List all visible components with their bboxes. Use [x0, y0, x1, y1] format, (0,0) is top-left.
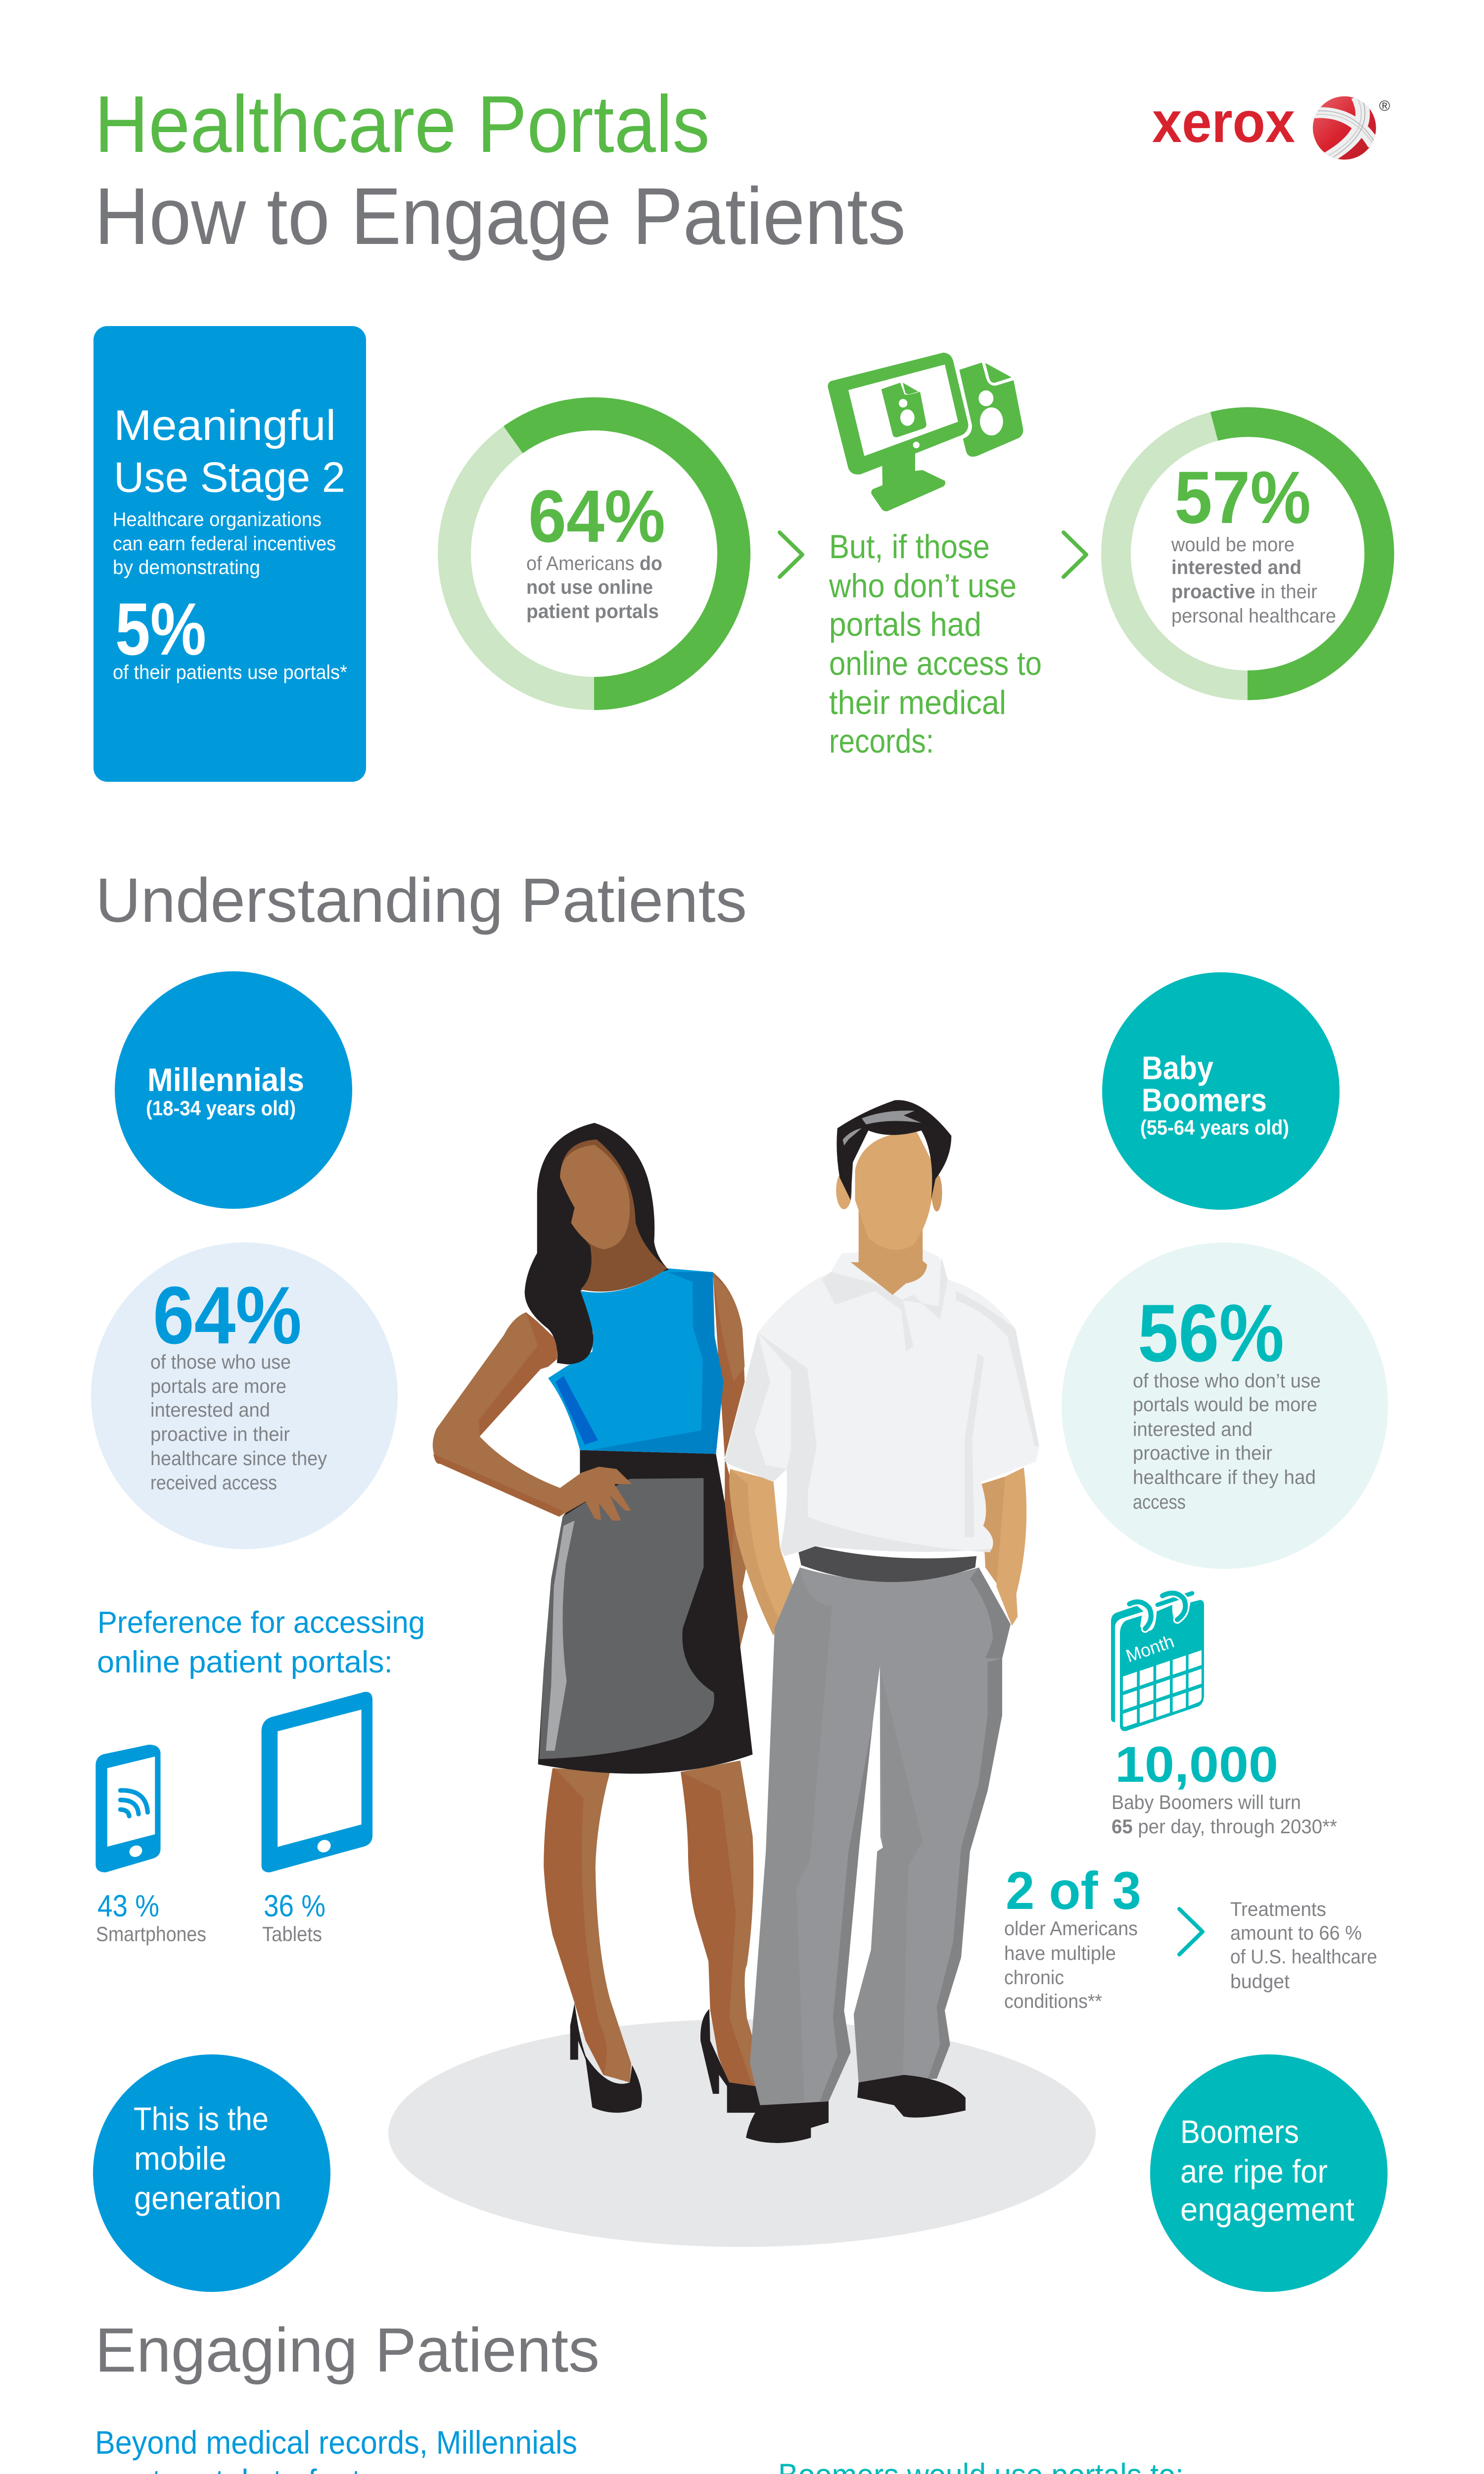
donut chart: 57% [1116, 422, 1379, 685]
circle: boomers stat 56%: of those who don’t use [1133, 1370, 1321, 1392]
stat: 43% smartphones: Smartphones [96, 1922, 206, 1946]
panel body text [113, 509, 336, 578]
stat: 2 of 3: 2 of 3 [1006, 1860, 1141, 1920]
text: treatments: of U.S. healthcare [1230, 1946, 1377, 1968]
circle: boomers stat 56%: healthcare if they had [1133, 1467, 1316, 1488]
text: millennials want portals to feature: Beyond medical records, Millennials [95, 2424, 577, 2461]
text: but, if those who don't use portals: who don’t use [829, 567, 1017, 605]
stat: 2 of 3: have multiple [1004, 1943, 1116, 1964]
donut chart: 57%: proactive in their [1171, 581, 1317, 603]
panel body text: can earn federal incentives [113, 533, 336, 555]
stat: 2 of 3: chronic [1004, 1967, 1064, 1989]
circle: millennials: Millennials [147, 1061, 304, 1098]
text: but, if those who don't use portals [829, 528, 1042, 760]
stat: 43% smartphones [96, 1889, 206, 1946]
circle: baby boomers: (55-64 years old) [1140, 1116, 1289, 1139]
text: treatments: budget [1230, 1971, 1290, 1993]
circle: millennials stat 64% [91, 1242, 398, 1549]
title [94, 79, 906, 261]
circle: boomers are ripe for engagement [1150, 2054, 1388, 2292]
stat: 5% [113, 587, 347, 683]
title: How to Engage Patients [94, 171, 906, 261]
circle: millennials: (18-34 years old) [146, 1096, 296, 1120]
text: preference heading: online patient portals: [97, 1645, 393, 1679]
circle: boomers stat 56%: proactive in their [1133, 1442, 1272, 1464]
stat: 2 of 3: conditions** [1004, 1991, 1102, 2012]
stat: 2 of 3: older Americans [1004, 1918, 1138, 1940]
circle: baby boomers: Baby [1142, 1049, 1213, 1086]
donut chart: 57%: would be more [1171, 534, 1295, 556]
circle: boomers are ripe for engagement: Boomers [1180, 2113, 1299, 2150]
title: Healthcare Portals [94, 79, 710, 169]
stat: 5%: 5% [115, 587, 206, 670]
circle: millennials stat 64%: 64% [153, 1270, 302, 1361]
circle: millennials stat 64%: portals are more [150, 1376, 286, 1397]
circle: this is the mobile generation: mobile [134, 2140, 227, 2177]
text: preference heading: Preference for accessing [97, 1606, 425, 1640]
icon: calendar [1111, 1593, 1204, 1731]
circle: boomers are ripe for engagement: are ripe for [1180, 2153, 1328, 2189]
panel body text: Healthcare organizations [113, 509, 322, 530]
circle: millennials stat 64%: of those who use [150, 1351, 291, 1373]
circle: millennials stat 64%: received access [150, 1472, 277, 1494]
text: but, if those who don't use portals: But, if those [829, 528, 990, 566]
donut chart: 57%: interested and [1171, 557, 1301, 578]
arrow: chevron [1064, 532, 1086, 577]
panel: meaningful use stage 2 [93, 326, 366, 782]
stat: 36% tablets: Tablets [262, 1922, 322, 1946]
stat: 2 of 3 [1004, 1860, 1141, 2012]
circle: millennials stat 64%: interested and [150, 1399, 270, 1421]
circle: boomers stat 56%: access [1133, 1491, 1186, 1513]
text: treatments [1230, 1899, 1377, 1993]
logo: xerox: ® [1379, 98, 1390, 114]
stat: 10,000 baby boomers: Baby Boomers will turn [1112, 1792, 1301, 1813]
circle: boomers stat 56%: 56% [1138, 1287, 1284, 1379]
donut chart: 57%: personal healthcare [1171, 605, 1336, 627]
circle: baby boomers: Boomers [1142, 1082, 1267, 1118]
text: but, if those who don't use portals: records: [829, 722, 934, 760]
circle: boomers stat 56%: portals would be more [1133, 1394, 1317, 1416]
text: but, if those who don't use portals: online access to [829, 645, 1042, 682]
donut chart: 64%: of Americans do [526, 553, 662, 574]
stat: 10,000 baby boomers: 10,000 [1115, 1736, 1278, 1793]
icon: calendar: Month [1123, 1631, 1177, 1666]
stat: 36% tablets: 36 % [264, 1889, 325, 1923]
icon: monitor and patient records [828, 353, 1023, 511]
text: millennials want portals to feature [94, 2424, 577, 2474]
icon: tablet [262, 1692, 372, 1872]
donut chart: 64%: 64% [528, 475, 665, 558]
circle: millennials [115, 971, 352, 1209]
circle: this is the mobile generation: generation [134, 2180, 281, 2216]
arrow: chevron [1179, 1909, 1203, 1954]
logo: xerox: xerox [1152, 90, 1295, 154]
circle: this is the mobile generation [93, 2054, 330, 2292]
stat: 5%: of their patients use portals* [113, 662, 347, 683]
circle: boomers stat 56%: interested and [1133, 1419, 1252, 1440]
logo: xerox [1152, 90, 1390, 160]
panel body text: by demonstrating [113, 557, 260, 578]
circle: boomers are ripe for engagement: engagement [1180, 2191, 1354, 2228]
illustration: woman [433, 1123, 762, 2113]
circle: millennials stat 64%: proactive in their [150, 1424, 290, 1445]
panel heading [114, 402, 345, 501]
text: but, if those who don't use portals: portals had [829, 606, 981, 643]
stat: 10,000 baby boomers: 65 per day, through 2030** [1112, 1816, 1337, 1838]
circle: boomers stat 56% [1062, 1242, 1388, 1569]
stat: 36% tablets [262, 1889, 325, 1946]
circle: baby boomers [1102, 972, 1340, 1210]
stat: 10,000 baby boomers [1112, 1736, 1337, 1838]
donut chart: 64%: patient portals [526, 601, 659, 622]
donut chart: 57%: 57% [1174, 456, 1311, 539]
circle: this is the mobile generation: This is the [134, 2100, 269, 2137]
circle: millennials stat 64%: healthcare since they [150, 1448, 327, 1470]
stat: 43% smartphones: 43 % [97, 1889, 159, 1923]
text: treatments: Treatments [1230, 1899, 1326, 1920]
text: preference heading [97, 1606, 425, 1679]
heading: understanding patients: Understanding Patients [95, 865, 747, 935]
floor shadow [388, 2019, 1096, 2247]
icon: smartphone [95, 1745, 160, 1872]
heading: engaging patients: Engaging Patients [95, 2315, 600, 2385]
text: but, if those who don't use portals: their medical [829, 684, 1006, 721]
arrow: chevron [780, 532, 802, 577]
text: treatments: amount to 66 % [1230, 1922, 1362, 1944]
illustration: man [725, 1100, 1039, 2143]
panel heading: Meaningful [114, 402, 336, 449]
donut chart: 64% [454, 414, 734, 694]
panel heading: Use Stage 2 [114, 454, 345, 501]
donut chart: 64%: not use online [526, 576, 653, 598]
